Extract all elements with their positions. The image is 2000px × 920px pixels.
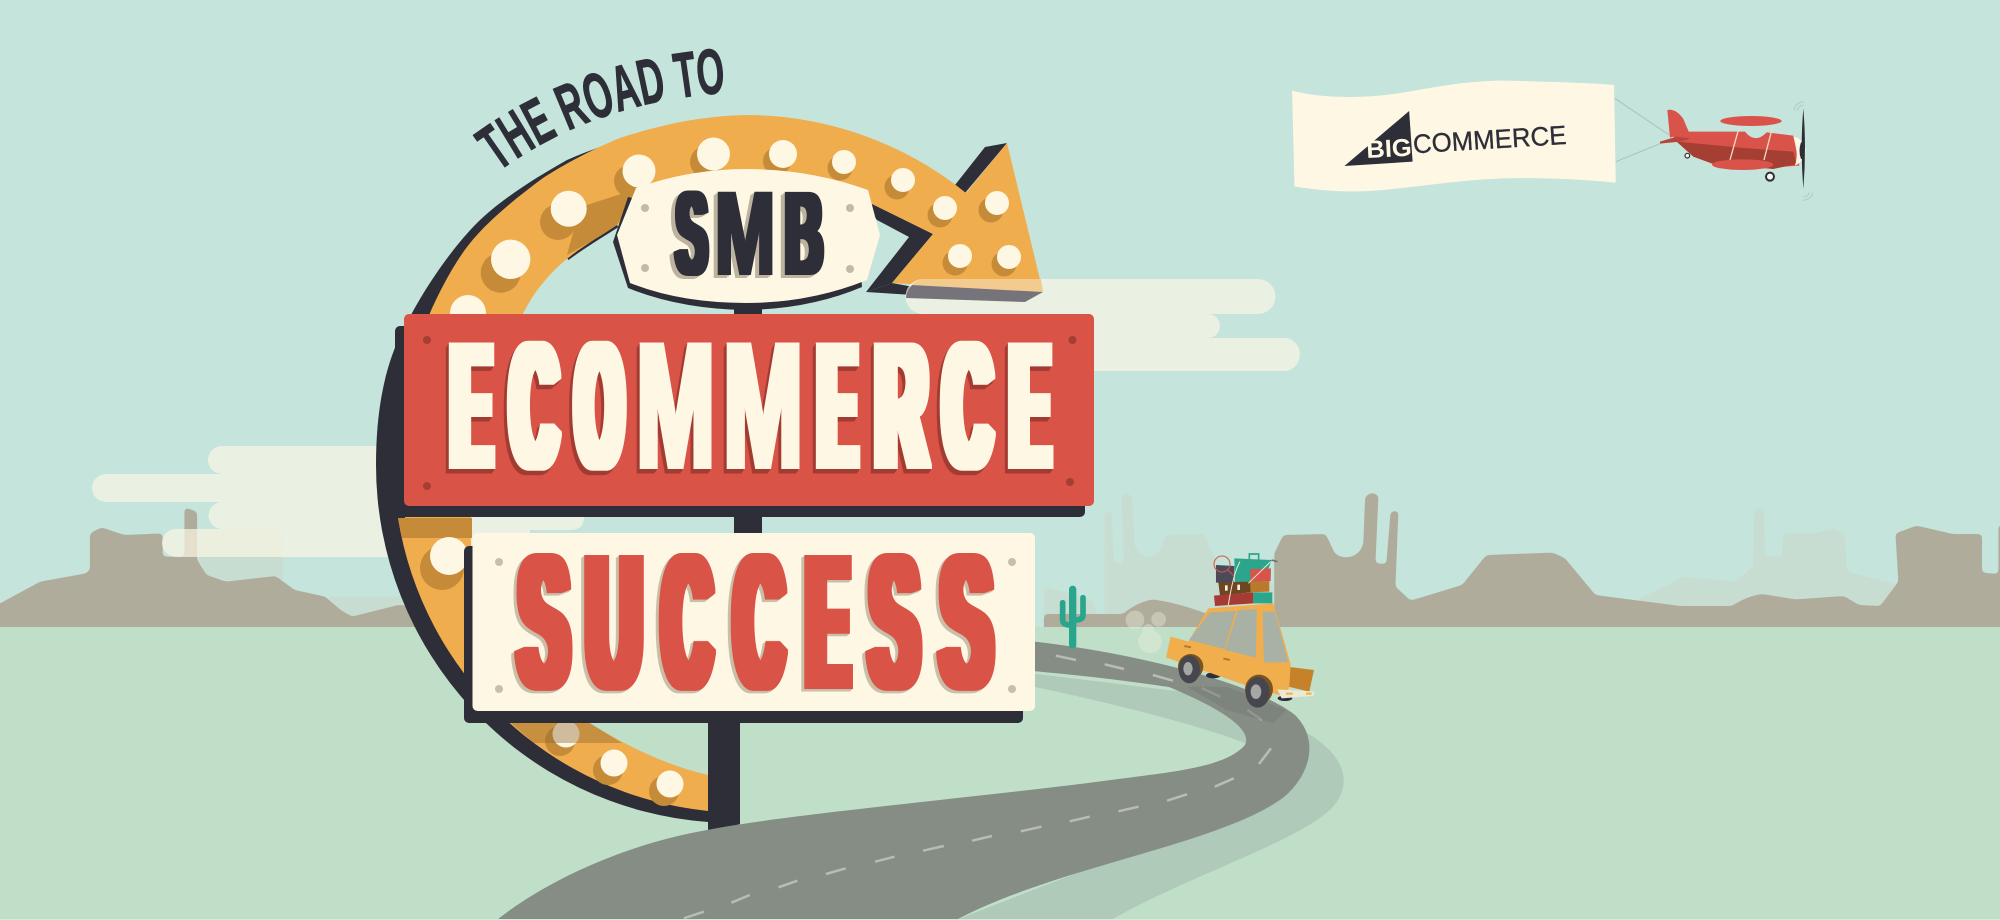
BigCommerce logo: COMMERCE (1412, 119, 1567, 159)
distant mesa, left (199, 530, 406, 620)
car windows (1189, 611, 1236, 649)
cream sign: S (941, 517, 992, 728)
car wheels (1179, 655, 1270, 708)
sign post (708, 300, 762, 834)
nose (1793, 137, 1806, 166)
road (497, 640, 1309, 920)
struts (1730, 127, 1773, 160)
propeller (1802, 108, 1805, 189)
ECOMMERCE double M letters: M (723, 306, 803, 505)
tailplane (1660, 137, 1691, 144)
cream sign face (472, 533, 1035, 711)
upper wing (1720, 116, 1782, 126)
plaque rivets (641, 204, 854, 273)
bumper (1277, 689, 1315, 698)
SMB plaque (613, 168, 880, 310)
arrow dark backing (376, 145, 708, 822)
BigCommerce logo (1344, 111, 1567, 166)
marquee arrow (376, 115, 1043, 822)
cream sign rivets (495, 558, 1016, 693)
distant mesas, right (1044, 493, 1898, 637)
SMB plaque: B (785, 168, 823, 300)
ECOMMERCE text: E (452, 306, 491, 505)
mesas, right foreground (1044, 493, 2000, 637)
ECOMMERCE text (452, 306, 1049, 505)
luggage stack (1214, 554, 1277, 606)
red sign face (404, 314, 1094, 506)
right cloud (906, 279, 1300, 371)
road shadow (956, 672, 1344, 920)
cactus (1063, 589, 1083, 645)
ECOMMERCE text: O (577, 306, 622, 505)
tow banner (1292, 81, 1669, 191)
cream sign (464, 517, 1035, 728)
wheels (1766, 173, 1774, 181)
ring patch beside sign (385, 400, 405, 518)
mesas, left foreground (0, 507, 425, 637)
BigCommerce logo: BIG (1366, 134, 1413, 164)
car smoke (1126, 611, 1166, 653)
ECOMMERCE text: C (511, 306, 557, 505)
SUCCESS text (519, 517, 992, 728)
red sign: E (1011, 306, 1049, 505)
ECOMMERCE text: E (819, 306, 856, 505)
plaque shadow on arrow (567, 190, 633, 255)
ECOMMERCE text: R (876, 306, 926, 505)
car handles (1184, 646, 1230, 660)
lower wing (1712, 159, 1773, 170)
SUCCESS text: C (663, 517, 711, 728)
bulb shadows (420, 146, 1016, 806)
red sign (385, 306, 1094, 518)
SUCCESS text: S (870, 517, 918, 728)
plaque dark backing (613, 197, 862, 310)
red sign backing (395, 326, 1085, 517)
ECOMMERCE double M letters: M (636, 306, 715, 505)
bottom edge line (0, 919, 2000, 920)
banner cloth (1292, 81, 1616, 191)
left cloud (92, 446, 584, 557)
tail fin (1667, 110, 1689, 138)
plaque face (617, 169, 880, 303)
lower sign shadow on arrow (511, 723, 622, 743)
SMB text: S (676, 168, 707, 300)
background: sky (0, 0, 2000, 628)
fuselage (1672, 132, 1799, 170)
sign shadow on arrow (398, 518, 472, 538)
shadow under car (1187, 687, 1287, 723)
red biplane (1660, 102, 1813, 200)
arrow tip seen through cloud (906, 279, 1043, 302)
arrow orange body (398, 115, 1043, 811)
car trunk (1273, 665, 1314, 692)
car with luggage (1166, 554, 1315, 708)
SUCCESS text: S (519, 517, 568, 728)
bulbs (430, 138, 1021, 798)
SMB text (676, 168, 823, 300)
SMB middle letter: M (715, 168, 775, 300)
SUCCESS text: E (807, 517, 848, 728)
wheel arches (1178, 654, 1203, 679)
SUCCESS text: U (587, 517, 641, 728)
road centre dashes (684, 656, 1271, 918)
ECOMMERCE text: C (944, 306, 991, 505)
tow ropes (1615, 98, 1669, 162)
red sign rivets (423, 336, 1076, 490)
far wheels (1206, 672, 1221, 678)
car body (1166, 603, 1291, 697)
cream sign backing (464, 546, 1023, 723)
heading: the road to: THE ROAD TO (472, 48, 724, 168)
SUCCESS text: C (735, 517, 783, 728)
ground (0, 627, 2000, 920)
